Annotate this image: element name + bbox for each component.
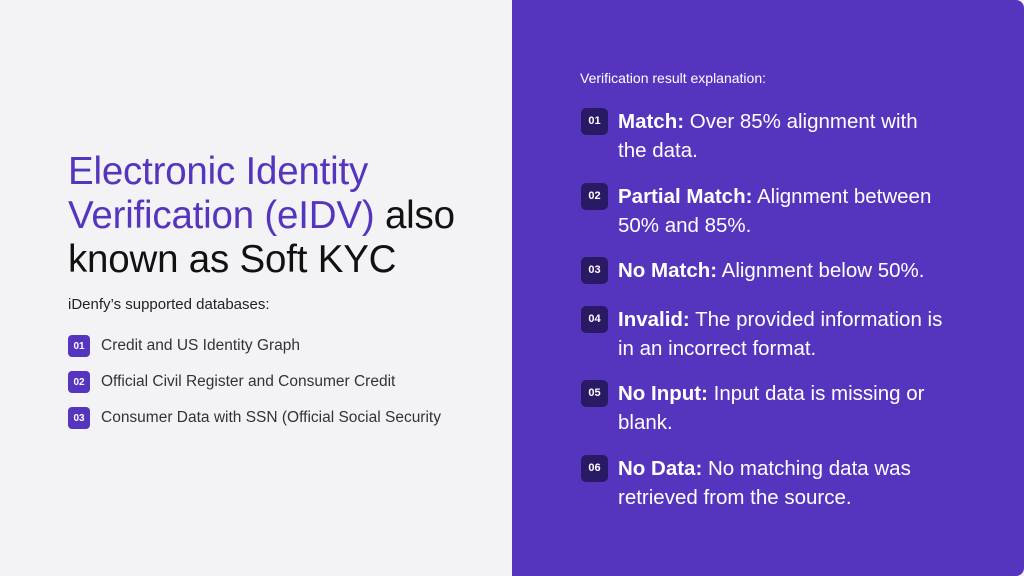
result 02 [581, 183, 931, 237]
result 01: 01 [588, 115, 601, 127]
subtitle: iDenfy’s supported databases: [68, 296, 270, 313]
list item 01: Credit and US Identity Graph [101, 337, 300, 354]
result 05 [581, 380, 924, 434]
result 02: Partial Match: Alignment between [618, 185, 931, 208]
list item 03: Consumer Data with SSN (Official Social Security [101, 409, 441, 426]
list item 02: Official Civil Register and Consumer Credit [101, 373, 395, 390]
result 05: No Input: Input data is missing or [618, 382, 924, 405]
result 04: 04 [588, 313, 601, 325]
title: Verification (eIDV) also [68, 194, 455, 237]
result 02: 02 [588, 190, 601, 202]
result 04: in an incorrect format. [618, 337, 816, 360]
result 01: the data. [618, 139, 698, 162]
list item 01 [68, 335, 300, 357]
panel heading: Verification result explanation: [580, 70, 766, 86]
result 03: No Match: Alignment below 50%. [618, 259, 924, 282]
list item 02: 02 [73, 376, 85, 388]
result 02: 50% and 85%. [618, 214, 751, 237]
title [68, 150, 455, 281]
result 03: 03 [588, 264, 601, 276]
list item 02 [68, 371, 396, 393]
result 05: blank. [618, 411, 673, 434]
result 01 [581, 108, 918, 162]
result 06: 06 [588, 462, 601, 474]
result 01: Match: Over 85% alignment with [618, 110, 918, 133]
title: Electronic Identity [68, 150, 368, 193]
result 06: No Data: No matching data was [618, 457, 911, 480]
result 04: Invalid: The provided information is [618, 308, 942, 331]
panel: verification results [512, 0, 1024, 576]
result 06 [581, 455, 911, 509]
list item 01: 01 [73, 340, 85, 352]
list item 03: 03 [73, 412, 85, 424]
result 05: 05 [588, 387, 601, 399]
title: known as Soft KYC [68, 238, 396, 281]
result 06: retrieved from the source. [618, 486, 852, 509]
result 04 [581, 306, 942, 360]
